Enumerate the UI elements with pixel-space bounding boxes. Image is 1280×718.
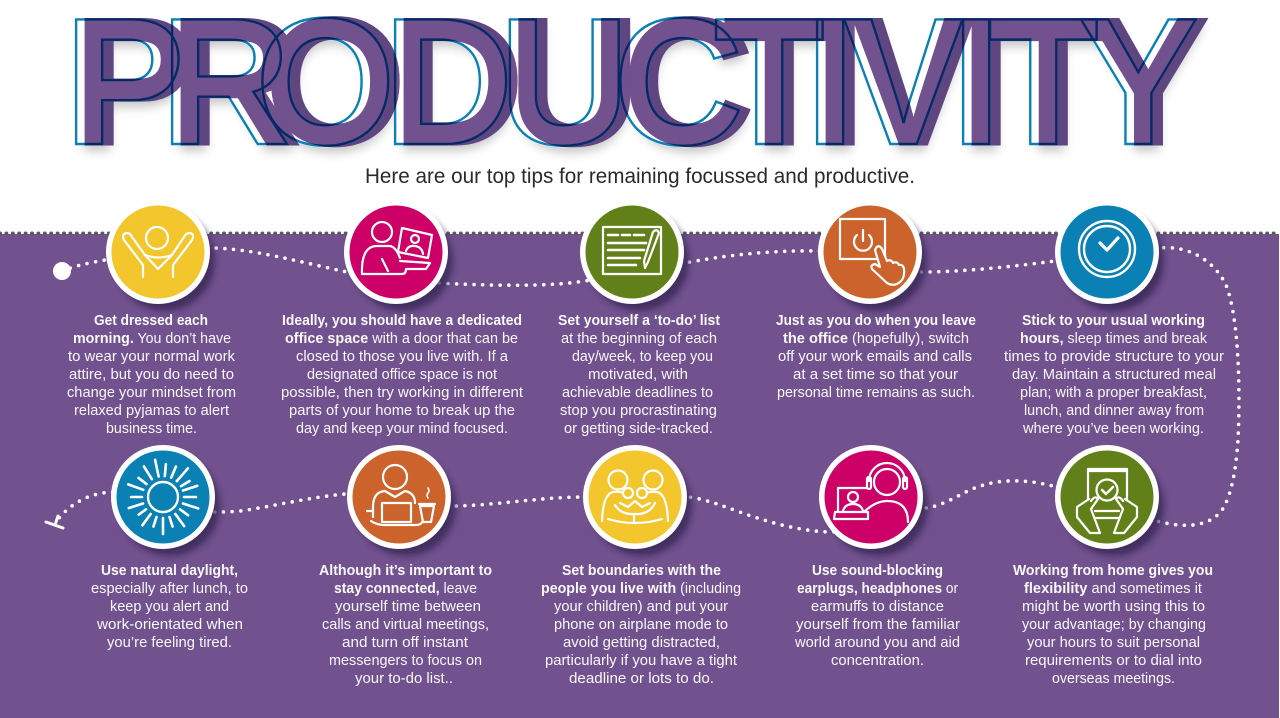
tip 5: working hours xyxy=(1004,200,1224,437)
text: stay connected: messengers to focus on xyxy=(329,653,482,669)
text: natural daylight: Use natural daylight, xyxy=(101,563,238,579)
text: to-do list: at the beginning of each xyxy=(561,331,717,347)
tip 1: get dressed xyxy=(67,200,236,437)
text: office space xyxy=(281,313,523,437)
text: working hours: times to provide structure to your xyxy=(1004,349,1224,365)
badge: yellow person icon xyxy=(106,200,215,311)
text: stay connected xyxy=(319,563,492,687)
text: flexibility: requirements or to dial into xyxy=(1025,653,1202,669)
text: get dressed: morning. You don’t have xyxy=(73,331,231,347)
path end arrow tick xyxy=(46,516,63,528)
text: natural daylight: you’re feeling tired. xyxy=(107,635,232,651)
text: working hours: Stick to your usual working xyxy=(1022,313,1205,329)
badge: blue sun icon xyxy=(111,445,220,556)
text: sound blocking: earplugs, headphones or xyxy=(797,581,958,597)
badge: yellow family icon xyxy=(583,445,692,556)
text: working hours xyxy=(1004,313,1224,437)
text: flexibility: Working from home gives you xyxy=(1013,563,1213,579)
text: stay connected: and turn off instant xyxy=(342,635,468,651)
dotted journey path xyxy=(56,248,1239,532)
text: get dressed: change your mindset from xyxy=(67,385,236,401)
text: natural daylight: especially after lunch, to xyxy=(91,581,248,597)
badge: magenta headphones icon xyxy=(819,445,928,556)
text: get dressed xyxy=(67,313,236,437)
text: switch off: Just as you do when you leave xyxy=(776,313,976,329)
text: get dressed: business time. xyxy=(106,421,197,437)
text: sound blocking: Use sound-blocking xyxy=(812,563,943,579)
text: natural daylight xyxy=(91,563,248,651)
text: get dressed: Get dressed each xyxy=(94,313,208,329)
subtitle: Here are our top tips for remaining focussed and productive. xyxy=(365,164,915,188)
badge: green notepad icon xyxy=(580,200,689,311)
text: working hours: plan; with a proper breakfast, xyxy=(1020,385,1207,401)
tip 8: set boundaries xyxy=(541,445,741,687)
text: flexibility: your advantage; by changing xyxy=(1022,617,1206,633)
text: office space: possible, then try working in different xyxy=(281,385,523,401)
text: to-do list: day/week, to keep you xyxy=(572,349,713,365)
text: sound blocking: earmuffs to distance xyxy=(811,599,944,615)
tip 6: natural daylight xyxy=(91,445,248,651)
purple background panel xyxy=(0,234,1279,718)
tip 7: stay connected xyxy=(319,445,492,687)
text: set boundaries: deadline or lots to do. xyxy=(569,671,714,687)
badge: orange laptop person icon xyxy=(347,445,456,556)
text: get dressed: to wear your normal work xyxy=(68,349,236,365)
text: natural daylight: keep you alert and xyxy=(110,599,229,615)
text: set boundaries: phone on airplane mode to xyxy=(554,617,728,633)
text: set boundaries xyxy=(541,563,741,687)
text: stay connected: stay connected, leave xyxy=(334,581,477,597)
text: get dressed: attire, but you do need to xyxy=(69,367,234,383)
text: flexibility: might be worth using this to xyxy=(1022,599,1205,615)
text: to-do list: achievable deadlines to xyxy=(562,385,713,401)
text: flexibility: flexibility and sometimes it xyxy=(1024,581,1202,597)
badge: green tablet icon xyxy=(1055,445,1164,556)
badge: orange power button icon xyxy=(818,200,927,311)
text: flexibility: your hours to suit personal xyxy=(1027,635,1200,651)
tip 10: flexibility xyxy=(1013,445,1213,687)
text: office space: Ideally, you should have a dedicated xyxy=(282,313,522,329)
text: to-do list: or getting side-tracked. xyxy=(564,421,713,437)
text: sound blocking xyxy=(794,563,960,669)
text: switch off: personal time remains as such. xyxy=(777,385,975,401)
tip 4: switch off xyxy=(776,200,976,401)
text: stay connected: Although it’s important to xyxy=(319,563,492,579)
text: set boundaries: Set boundaries with the xyxy=(562,563,721,579)
tip 9: sound blocking xyxy=(794,445,960,669)
text: to-do list: motivated, with xyxy=(588,367,688,383)
text: switch off: off your work emails and calls xyxy=(778,349,972,365)
text: set boundaries: particularly if you have a tight xyxy=(545,653,737,669)
text: sound blocking: yourself from the familiar xyxy=(796,617,960,633)
text: sound blocking: world around you and aid xyxy=(794,635,960,651)
text: stay connected: yourself time between xyxy=(335,599,481,615)
path start dot xyxy=(53,262,71,280)
text: switch off: at a set time so that your xyxy=(793,367,958,383)
text: to-do list: stop you procrastinating xyxy=(560,403,717,419)
text: set boundaries: avoid getting distracted, xyxy=(563,635,720,651)
text: office space: closed to those you live with. If a xyxy=(296,349,509,365)
text: to-do list: Set yourself a ‘to-do’ list xyxy=(558,313,720,329)
text: working hours: where you’ve been working. xyxy=(1022,421,1204,437)
text: office space: designated office space is not xyxy=(307,367,497,383)
badge: blue clock icon xyxy=(1055,200,1164,311)
text: stay connected: calls and virtual meetings, xyxy=(322,617,489,633)
tip 3: to-do list xyxy=(558,200,720,437)
text: stay connected: your to-do list.. xyxy=(355,671,453,687)
text: get dressed: relaxed pyjamas to alert xyxy=(74,403,229,419)
text: working hours: lunch, and dinner away from xyxy=(1024,403,1204,419)
text: natural daylight: work-orientated when xyxy=(96,617,243,633)
text: office space: parts of your home to break up the xyxy=(289,403,515,419)
text: working hours: day. Maintain a structured meal xyxy=(1012,367,1216,383)
text: set boundaries: people you live with (including xyxy=(541,581,741,597)
badge: magenta video call icon xyxy=(344,200,453,311)
text: office space: day and keep your mind focused. xyxy=(296,421,508,437)
text: switch off xyxy=(776,313,976,401)
text: switch off: the office (hopefully), switch xyxy=(783,331,969,347)
text: office space: office space with a door that can be xyxy=(285,331,518,347)
text: flexibility xyxy=(1013,563,1213,687)
text: working hours: hours, sleep times and break xyxy=(1020,331,1208,347)
text: to-do list xyxy=(558,313,720,437)
tip 2: office space xyxy=(281,200,523,437)
text: sound blocking: concentration. xyxy=(831,653,924,669)
text: flexibility: overseas meetings. xyxy=(1052,671,1175,687)
text: set boundaries: your children) and put your xyxy=(554,599,728,615)
